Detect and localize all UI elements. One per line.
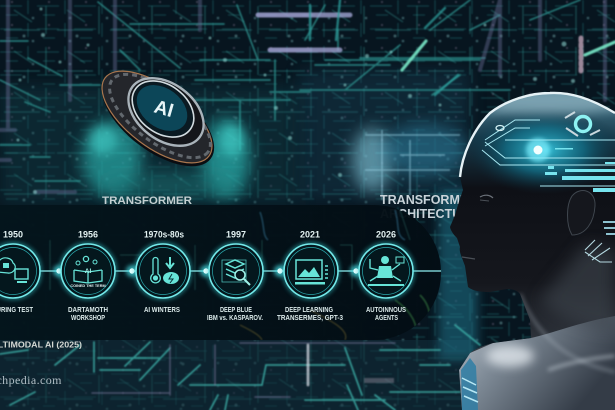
- milestone: 1956 Dartmouth Workshop: DARTAMOTH: [68, 307, 108, 314]
- lower circuit lines: [0, 325, 480, 410]
- coin label: AI: [152, 97, 176, 122]
- glowing core: [526, 138, 550, 162]
- scattered particles: [16, 8, 575, 194]
- timeline axis: [0, 269, 441, 273]
- milestone: 1970s-80s AI Winters: 1970s-80s: [144, 230, 184, 240]
- axis nodes: [53, 265, 362, 277]
- faint panel circuitry: [50, 210, 430, 340]
- milestone: 1956 Dartmouth Workshop: AI: [85, 268, 91, 275]
- milestone: 1997 Deep Blue: 1997: [226, 230, 246, 240]
- milestone: 2026 Autonomous Agents: 2026: [376, 230, 396, 240]
- milestone: 2026 Autonomous Agents: AUTOINNOUS: [366, 307, 406, 314]
- cyan data bars: [545, 148, 615, 192]
- milestone: 1997 Deep Blue: DEEP BLUE: [220, 307, 252, 314]
- chip ring: [576, 116, 590, 132]
- eye and lip accents: [480, 195, 493, 198]
- milestone: 1997 Deep Blue: IBM vs. KASPAROV.: [207, 315, 263, 322]
- milestone: 2026 Autonomous Agents: [359, 230, 413, 322]
- panel: timeline: [0, 205, 441, 340]
- milestone: 1997 Deep Blue: [207, 230, 263, 322]
- background label: transformer right: ARCHITECTURE: [380, 207, 479, 221]
- milestone: 1970s-80s AI Winters: AI WINTERS: [144, 307, 180, 314]
- milestone: 2021 Deep Learning: [277, 230, 343, 322]
- figure: AI head profile: [450, 90, 615, 410]
- lower neck circuit: [585, 240, 612, 262]
- milestone: 1956 Dartmouth Workshop: [61, 230, 115, 322]
- milestone: 2021 Deep Learning: 2021: [300, 230, 320, 240]
- milestone: 1950 Turing Test: [0, 230, 40, 314]
- milestone: 1950 Turing Test: 1950: [3, 230, 23, 240]
- glow clouds: [82, 120, 142, 196]
- milestone: 1970s-80s AI Winters: [136, 230, 190, 314]
- background label: transformer left: TRANSFORMER: [102, 195, 192, 207]
- milestone: 2021 Deep Learning: DEEP LEARNING: [285, 307, 333, 314]
- background label: transformer right: TRANSFORMER: [380, 193, 477, 207]
- ear: [568, 191, 595, 235]
- milestone: 1956 Dartmouth Workshop: 1956: [78, 230, 98, 240]
- head rim light: [460, 93, 615, 177]
- cranium glow: [482, 114, 608, 190]
- background label: transformer right: [380, 193, 479, 221]
- milestone: 1956 Dartmouth Workshop: WORKSHOP: [71, 315, 105, 322]
- milestone: 2021 Deep Learning: TRANSERMES, GPT-3: [277, 315, 343, 322]
- milestone: 1956 Dartmouth Workshop: COINED THE TERM: [70, 284, 106, 288]
- neck and shoulder shading: [459, 316, 615, 410]
- milestone: 2026 Autonomous Agents: AGENTS: [375, 315, 398, 322]
- shoulder panel: [461, 358, 478, 410]
- icon: AI coin: [86, 54, 230, 184]
- circuit lines on head: [482, 120, 615, 186]
